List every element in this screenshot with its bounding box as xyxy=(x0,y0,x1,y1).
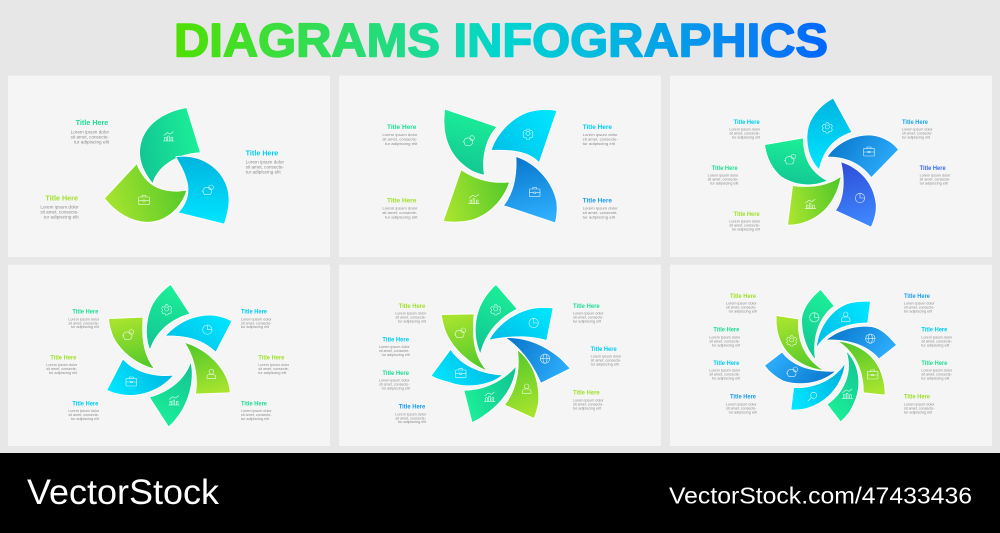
label: lime top-left: Lorem ipsum dolor xyxy=(726,302,757,306)
label: cyan title xyxy=(246,149,285,175)
footer url: VectorStock.com/47433436 xyxy=(669,482,972,508)
label: bottom-left: Lorem ipsum dolor xyxy=(68,409,100,413)
petal: teal top xyxy=(476,285,517,353)
label: teal title: Lorem ipsum dolor xyxy=(71,129,110,134)
label: cyan right: Lorem ipsum dolor xyxy=(591,355,622,359)
icon: briefcase xyxy=(139,196,149,205)
label: cyan right: Title Here xyxy=(921,328,948,334)
label: teal title xyxy=(71,118,110,144)
label: lime title xyxy=(382,197,418,219)
label: top-right: tur adipiscing elit xyxy=(241,325,269,329)
label: teal title xyxy=(708,166,739,185)
label: top-left: tur adipiscing elit xyxy=(71,325,99,329)
label: teal left xyxy=(379,371,410,390)
label: blue top-right xyxy=(904,294,935,314)
label: lime title: tur adipiscing elit xyxy=(44,214,79,219)
footer bar xyxy=(0,453,1000,533)
icon: gear xyxy=(822,123,832,133)
petal: teal top xyxy=(802,290,834,359)
label: cyan right xyxy=(921,328,953,347)
label: blue bottom-left xyxy=(726,395,757,414)
label: blue title: sit amet, consecte- xyxy=(583,210,618,215)
label: right: sit amet, consecte- xyxy=(258,367,290,371)
panel: 4-petal diagram xyxy=(339,76,661,257)
petal: blue right xyxy=(507,338,570,383)
label: teal left: sit amet, consecte- xyxy=(709,339,741,343)
label: lime title xyxy=(40,194,79,219)
label: right: tur adipiscing elit xyxy=(258,371,286,375)
label: cyan title: Title Here xyxy=(246,149,278,158)
label: top-right: Title Here xyxy=(241,310,268,316)
label: lime bottom-right: tur adipiscing elit xyxy=(904,410,932,414)
label: lime top-left: Title Here xyxy=(399,304,426,310)
label: lime right: Lorem ipsum dolor xyxy=(573,398,604,402)
label: teal left: sit amet, consecte- xyxy=(379,382,410,386)
label: blue top-right: Lorem ipsum dolor xyxy=(904,302,935,306)
label: cyan title: sit amet, consecte- xyxy=(246,165,285,170)
label: cyan title: tur adipiscing elit xyxy=(246,170,281,175)
label: blue left: Title Here xyxy=(399,404,426,410)
label: lime title: sit amet, consecte- xyxy=(40,209,79,214)
label: lime top-left: sit amet, consecte- xyxy=(395,315,427,319)
label: teal left: Lorem ipsum dolor xyxy=(379,378,410,382)
label: cyan right: sit amet, consecte- xyxy=(591,359,622,363)
label: blue title: tur adipiscing elit xyxy=(902,135,930,139)
petal: teal xyxy=(444,110,496,175)
footer logo: VectorStock xyxy=(27,473,220,512)
label: top-right: sit amet, consecte- xyxy=(241,321,272,325)
petal: lime left xyxy=(109,318,154,368)
label: indigo title: Lorem ipsum dolor xyxy=(920,174,951,178)
label: lime top-left xyxy=(726,294,757,314)
label: bottom-right: Title Here xyxy=(241,401,268,407)
label: top-left: sit amet, consecte- xyxy=(68,321,100,325)
label: teal right xyxy=(921,361,953,381)
petal: cyan right xyxy=(166,315,231,352)
label: lime right xyxy=(573,391,604,410)
label: blue top-right: tur adipiscing elit xyxy=(904,310,932,314)
icon: gear xyxy=(491,305,501,315)
label: blue top-right: Title Here xyxy=(904,294,931,300)
label: teal top-right: tur adipiscing elit xyxy=(573,319,601,323)
icon: chart xyxy=(842,389,853,398)
label: bottom-left: Title Here xyxy=(72,401,99,407)
label: cyan title: sit amet, consecte- xyxy=(729,132,761,136)
icon: piggy bank xyxy=(122,330,134,339)
petal: teal bottom xyxy=(150,363,192,426)
label: teal left: tur adipiscing elit xyxy=(382,386,410,390)
label: cyan title: tur adipiscing elit xyxy=(583,141,616,146)
label: blue top-right: sit amet, consecte- xyxy=(904,306,935,310)
label: cyan right: sit amet, consecte- xyxy=(921,339,953,343)
panel: 3-petal diagram xyxy=(8,76,330,257)
label: top-left xyxy=(68,310,100,329)
icon: pie chart xyxy=(529,318,538,328)
label: cyan left: Lorem ipsum dolor xyxy=(709,369,741,373)
label: lime title: sit amet, consecte- xyxy=(729,224,761,228)
icon: piggy bank xyxy=(202,185,213,195)
panel: 7-petal diagram xyxy=(339,265,661,446)
label: blue title: tur adipiscing elit xyxy=(583,214,616,219)
label: top-right: Lorem ipsum dolor xyxy=(241,317,272,321)
petal: blue xyxy=(504,157,557,222)
label: teal left xyxy=(709,328,741,347)
label: lime top-left: tur adipiscing elit xyxy=(729,310,757,314)
label: blue title: Lorem ipsum dolor xyxy=(583,206,618,211)
label: blue title xyxy=(902,120,933,139)
label: teal title: sit amet, consecte- xyxy=(382,136,418,141)
petal: lime right xyxy=(185,343,230,394)
label: bottom-left: sit amet, consecte- xyxy=(68,413,100,417)
label: cyan left xyxy=(709,361,741,381)
icon: chart xyxy=(805,199,816,209)
icon: chart xyxy=(163,132,174,141)
label: top-left: Title Here xyxy=(72,310,99,316)
label: teal title: sit amet, consecte- xyxy=(71,134,110,139)
icon: pie chart xyxy=(203,325,212,334)
label: cyan right: Lorem ipsum dolor xyxy=(921,335,953,339)
label: left xyxy=(46,356,78,375)
label: cyan left: Title Here xyxy=(713,361,740,367)
label: lime title: Lorem ipsum dolor xyxy=(40,204,79,209)
petal: lime xyxy=(444,170,509,222)
icon: globe xyxy=(540,354,550,363)
label: left: Title Here xyxy=(50,356,77,362)
label: teal title: tur adipiscing elit xyxy=(710,181,738,185)
label: bottom-right xyxy=(241,401,272,421)
icon: chart xyxy=(484,392,495,401)
label: blue left xyxy=(395,404,427,424)
label: cyan title xyxy=(583,124,618,146)
label: teal left: Title Here xyxy=(382,371,410,377)
icon: briefcase xyxy=(867,370,878,379)
label: blue left: sit amet, consecte- xyxy=(395,416,427,420)
petal: cyan xyxy=(492,110,556,162)
petal: cyan xyxy=(176,157,229,224)
label: bottom-right: Lorem ipsum dolor xyxy=(241,409,272,413)
label: right: Lorem ipsum dolor xyxy=(258,363,290,367)
icon: search xyxy=(808,392,817,401)
label: lime bottom-right: Lorem ipsum dolor xyxy=(904,402,935,406)
label: teal left: Lorem ipsum dolor xyxy=(709,335,741,339)
petal: cyan left xyxy=(432,350,502,385)
icon: briefcase xyxy=(455,369,466,378)
icon: piggy bank xyxy=(784,154,796,164)
label: teal top-right: Lorem ipsum dolor xyxy=(573,311,604,315)
icon: piggy bank xyxy=(786,367,798,377)
label: lime bottom-right: Title Here xyxy=(904,395,931,401)
label: teal title: tur adipiscing elit xyxy=(74,139,110,144)
icon: chart xyxy=(169,396,179,405)
label: teal title: Title Here xyxy=(76,118,108,127)
icon: pie chart xyxy=(855,193,865,203)
label: lime title: Title Here xyxy=(387,197,417,204)
label: bottom-left: tur adipiscing elit xyxy=(71,417,99,421)
label: lime title: Lorem ipsum dolor xyxy=(729,220,761,224)
label: lime title: Lorem ipsum dolor xyxy=(382,206,418,211)
petal: teal bottom xyxy=(464,367,516,422)
label: lime top-left: Lorem ipsum dolor xyxy=(395,311,427,315)
label: cyan title: sit amet, consecte- xyxy=(583,136,618,141)
label: lime top-left: sit amet, consecte- xyxy=(726,306,757,310)
label: blue title: Lorem ipsum dolor xyxy=(902,128,933,132)
label: cyan left: Lorem ipsum dolor xyxy=(379,345,410,349)
icon: person xyxy=(522,384,531,393)
label: right: Title Here xyxy=(258,356,285,362)
label: cyan right: tur adipiscing elit xyxy=(921,343,949,347)
icon: person xyxy=(841,312,850,321)
petal: teal xyxy=(140,108,200,183)
label: cyan left: tur adipiscing elit xyxy=(382,353,410,357)
label: teal right: sit amet, consecte- xyxy=(921,373,953,377)
icon: globe xyxy=(866,334,875,343)
label: lime top-left: Title Here xyxy=(730,294,757,300)
icon: briefcase xyxy=(529,188,540,197)
label: cyan title xyxy=(729,120,761,139)
petal: lime lower right xyxy=(505,351,538,418)
petal: lime upper left xyxy=(776,316,822,370)
icon: gear xyxy=(162,305,172,315)
petal: blue right xyxy=(827,327,896,358)
label: blue title xyxy=(583,197,618,219)
label: teal title xyxy=(382,124,418,146)
label: teal right: Lorem ipsum dolor xyxy=(921,369,953,373)
label: left: Lorem ipsum dolor xyxy=(46,363,78,367)
label: top-left: Lorem ipsum dolor xyxy=(68,317,100,321)
petal: indigo xyxy=(836,162,876,227)
label: blue title: sit amet, consecte- xyxy=(902,132,933,136)
petal: blue xyxy=(828,135,898,177)
icon: person xyxy=(207,369,216,379)
icon: briefcase xyxy=(126,377,137,386)
petal: cyan xyxy=(807,99,851,169)
icon: gear xyxy=(787,336,797,346)
label: cyan left xyxy=(379,337,410,357)
label: lime bottom-right xyxy=(904,395,935,414)
petal: blue left xyxy=(765,353,835,383)
label: lime title: tur adipiscing elit xyxy=(385,214,418,219)
label: teal left: tur adipiscing elit xyxy=(712,343,740,347)
petal: lime xyxy=(788,177,841,225)
label: lime title: Title Here xyxy=(45,194,78,203)
label: blue bottom-left: Title Here xyxy=(730,395,757,401)
label: cyan title: Lorem ipsum dolor xyxy=(246,160,285,165)
label: blue title: Title Here xyxy=(583,197,612,204)
icon: gear xyxy=(523,129,533,139)
label: teal right: Title Here xyxy=(921,361,948,367)
label: indigo title: tur adipiscing elit xyxy=(920,181,948,185)
icon: briefcase xyxy=(864,147,874,156)
label: bottom-left xyxy=(68,401,100,421)
label: teal right: tur adipiscing elit xyxy=(921,377,949,381)
label: cyan title: Lorem ipsum dolor xyxy=(583,132,618,137)
label: teal top-right xyxy=(573,304,604,323)
label: blue left: Lorem ipsum dolor xyxy=(395,412,427,416)
petal: cyan left xyxy=(107,360,173,395)
icon: pie chart xyxy=(810,313,819,322)
label: teal left: Title Here xyxy=(713,328,740,334)
label: teal top-right: Title Here xyxy=(573,304,600,310)
label: bottom-right: tur adipiscing elit xyxy=(241,417,269,421)
label: lime top-left xyxy=(395,304,427,323)
label: bottom-right: sit amet, consecte- xyxy=(241,413,272,417)
panel: 6-petal diagram xyxy=(8,265,330,446)
label: cyan title: tur adipiscing elit xyxy=(732,135,760,139)
label: indigo title: sit amet, consecte- xyxy=(920,178,951,182)
label: teal title: Lorem ipsum dolor xyxy=(382,132,418,137)
label: lime title: sit amet, consecte- xyxy=(382,210,418,215)
label: lime title: Title Here xyxy=(734,212,760,218)
label: blue bottom-left: Lorem ipsum dolor xyxy=(726,402,757,406)
label: teal top-right: sit amet, consecte- xyxy=(573,315,604,319)
label: lime right: sit amet, consecte- xyxy=(573,402,604,406)
label: teal title: Title Here xyxy=(387,124,417,131)
label: lime right: tur adipiscing elit xyxy=(573,406,601,410)
label: left: sit amet, consecte- xyxy=(46,367,78,371)
title: DIAGRAMS INFOGRAPHICS xyxy=(174,14,828,67)
label: cyan right: tur adipiscing elit xyxy=(591,363,619,367)
petal: teal top xyxy=(147,285,189,349)
icon: piggy bank xyxy=(463,136,474,145)
label: blue left: tur adipiscing elit xyxy=(398,420,426,424)
petal: teal xyxy=(765,138,827,184)
label: teal title: Lorem ipsum dolor xyxy=(708,174,739,178)
label: cyan left: sit amet, consecte- xyxy=(709,373,741,377)
petal: cyan bottom left xyxy=(791,364,845,410)
label: indigo title xyxy=(920,166,951,185)
petal: lime lower right xyxy=(839,342,885,395)
label: cyan title: Lorem ipsum dolor xyxy=(729,128,761,132)
icon: piggy bank xyxy=(454,328,466,338)
label: cyan left: sit amet, consecte- xyxy=(379,349,410,353)
label: blue title: Title Here xyxy=(902,120,929,126)
label: cyan title: Title Here xyxy=(583,124,612,131)
label: lime title: tur adipiscing elit xyxy=(732,228,760,232)
label: teal title: Title Here xyxy=(712,166,738,172)
label: right xyxy=(258,356,290,375)
label: cyan left: Title Here xyxy=(382,337,410,343)
label: top-right xyxy=(241,310,272,329)
panel: 5-petal diagram xyxy=(670,76,992,257)
label: blue bottom-left: sit amet, consecte- xyxy=(726,406,757,410)
petal: cyan upper right xyxy=(817,302,870,347)
label: teal title: tur adipiscing elit xyxy=(385,141,418,146)
label: lime top-left: tur adipiscing elit xyxy=(398,319,426,323)
label: cyan right: Title Here xyxy=(591,347,617,353)
petal: teal bottom xyxy=(828,352,858,421)
petal: cyan upper right xyxy=(490,308,553,340)
label: blue bottom-left: tur adipiscing elit xyxy=(729,410,757,414)
panel: 8-petal diagram xyxy=(670,265,992,446)
label: lime title xyxy=(729,212,761,232)
label: left: tur adipiscing elit xyxy=(49,371,77,375)
label: cyan left: tur adipiscing elit xyxy=(712,377,740,381)
label: lime right: Title Here xyxy=(573,391,600,397)
label: cyan right xyxy=(591,347,622,367)
label: lime bottom-right: sit amet, consecte- xyxy=(904,406,935,410)
label: teal title: sit amet, consecte- xyxy=(708,178,739,182)
icon: chart xyxy=(469,194,479,204)
petal: lime xyxy=(105,164,186,222)
label: indigo title: Title Here xyxy=(920,166,946,172)
label: cyan title: Title Here xyxy=(734,120,760,126)
petal: lime upper left xyxy=(442,314,486,370)
